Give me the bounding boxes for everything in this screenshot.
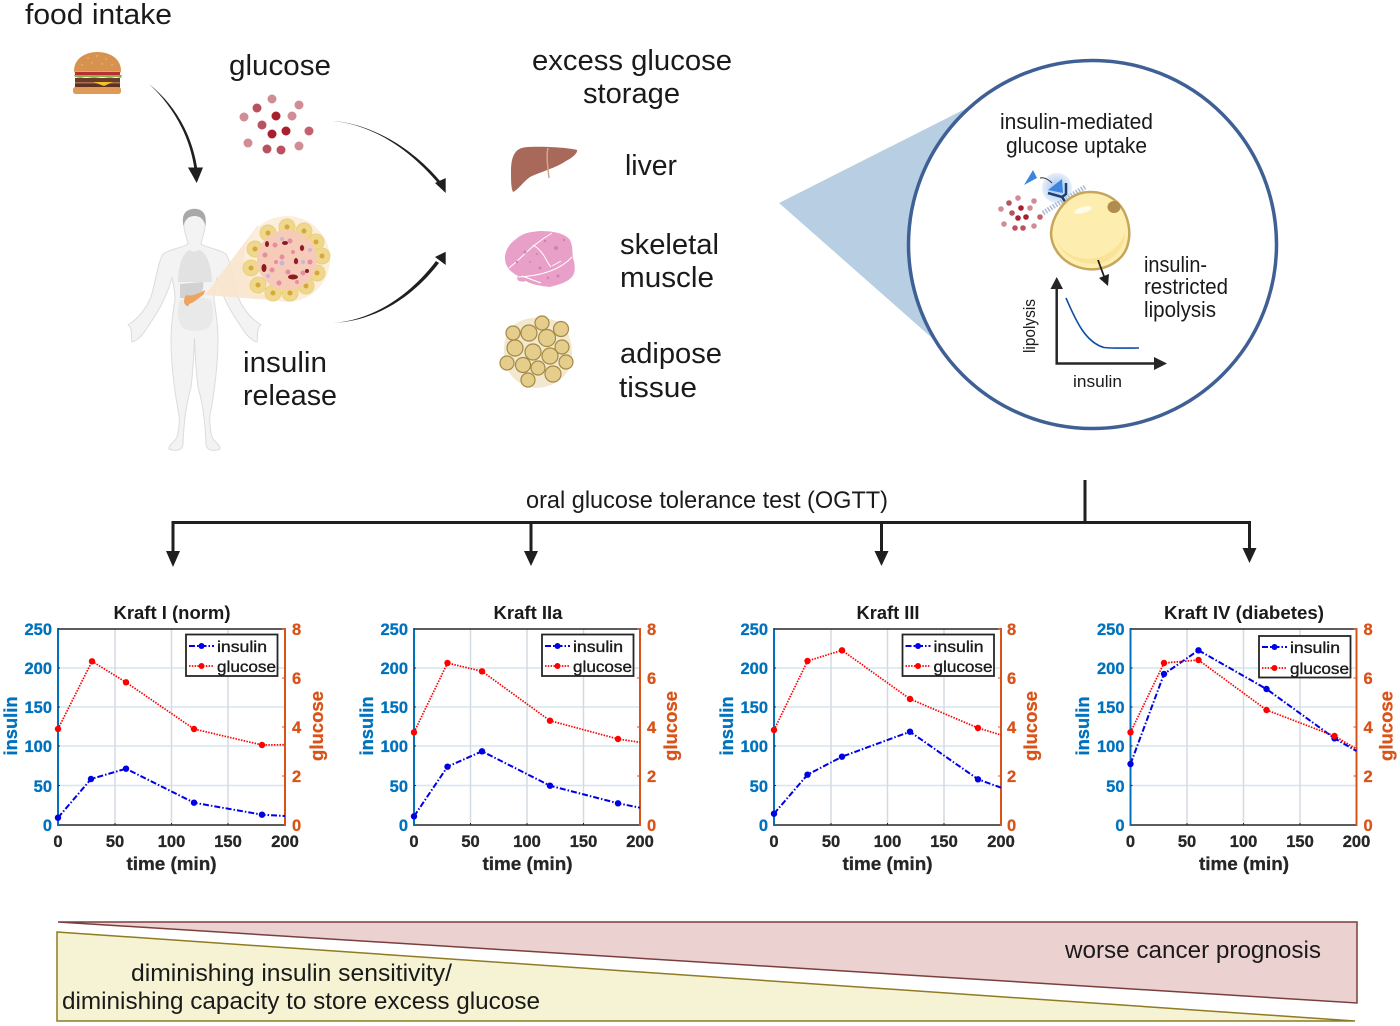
arrow: glucose to storage bbox=[333, 121, 446, 193]
chart: Kraft III bbox=[717, 603, 1041, 874]
chart: Kraft IV (diabetes): 150 bbox=[1286, 833, 1314, 851]
chart: Kraft IIa: insulin bbox=[573, 639, 623, 656]
chart: Kraft III: 150 bbox=[740, 699, 768, 717]
chart: Kraft III: 6 bbox=[1007, 670, 1016, 688]
icon: adipose tissue bbox=[500, 316, 573, 388]
chart: Kraft IV (diabetes): 250 bbox=[1097, 621, 1124, 639]
chart: Kraft IIa: 100 bbox=[380, 738, 408, 756]
chart: Kraft IIa: 150 bbox=[570, 833, 597, 851]
chart: Kraft III: insulin bbox=[717, 696, 737, 756]
chart: Kraft IV (diabetes): 6 bbox=[1364, 670, 1373, 688]
chart: Kraft III: time (min) bbox=[842, 854, 932, 874]
heading: insulin-mediated glucose uptake: insulin-mediated bbox=[1000, 109, 1153, 134]
chart: Kraft I (norm): insulin bbox=[217, 639, 267, 656]
chart: Kraft I (norm): 2 bbox=[292, 768, 301, 786]
wedge: diminishing insulin sensitivity bbox=[57, 932, 1355, 1021]
chart: Kraft I (norm): 100 bbox=[158, 833, 185, 851]
chart: Kraft IIa: 50 bbox=[461, 833, 480, 851]
arrows: OGTT tree bbox=[166, 480, 1256, 567]
chart: Kraft I (norm): 8 bbox=[292, 621, 301, 639]
icon: insulin receptor bbox=[1024, 170, 1085, 213]
chart: Kraft I (norm): 150 bbox=[214, 833, 242, 851]
chart: Kraft IV (diabetes): 4 bbox=[1364, 719, 1374, 737]
chart: Kraft III: 250 bbox=[740, 621, 768, 639]
label: adipose tissue: tissue bbox=[619, 372, 697, 404]
panel: adipocyte magnifier circle bbox=[908, 60, 1276, 428]
chart: Kraft I (norm): time (min) bbox=[126, 854, 216, 874]
chart: Kraft I (norm): glucose bbox=[307, 691, 327, 761]
chart: Kraft IIa: 0 bbox=[647, 817, 656, 835]
chart: Kraft IV (diabetes) bbox=[1073, 603, 1396, 874]
chart: Kraft I (norm): 0 bbox=[53, 833, 63, 851]
wedge: diminishing insulin sensitivity: diminishing insulin sensitivity/ bbox=[131, 960, 452, 987]
heading: insulin release bbox=[243, 347, 337, 412]
chart: Kraft IV (diabetes): 8 bbox=[1364, 621, 1373, 639]
chart: Kraft III: 2 bbox=[1007, 768, 1016, 786]
chart: Kraft IIa: 200 bbox=[626, 833, 654, 851]
chart: Kraft IV (diabetes): 200 bbox=[1343, 833, 1370, 851]
chart: Kraft I (norm): 0 bbox=[43, 817, 52, 835]
chart: lipolysis vs insulin: lipolysis bbox=[1020, 299, 1039, 353]
chart: Kraft IV (diabetes): insulin bbox=[1073, 696, 1093, 756]
chart: Kraft IIa: 100 bbox=[513, 833, 541, 851]
icon: pancreatic islet bbox=[205, 216, 330, 302]
chart: Kraft III: insulin bbox=[934, 639, 984, 656]
chart: Kraft III: 200 bbox=[740, 660, 768, 678]
chart: Kraft IV (diabetes): 0 bbox=[1115, 817, 1124, 835]
chart: Kraft I (norm): 250 bbox=[24, 621, 52, 639]
chart: Kraft IV (diabetes): glucose bbox=[1376, 691, 1396, 761]
heading: excess glucose storage: excess glucose bbox=[532, 45, 732, 77]
chart: Kraft IIa: 6 bbox=[647, 670, 656, 688]
label: insulin-restricted lipolysis: insulin- bbox=[1144, 252, 1207, 277]
heading: glucose: glucose bbox=[229, 50, 331, 82]
chart: Kraft IV (diabetes): 200 bbox=[1097, 660, 1124, 678]
chart: Kraft IIa: insulin bbox=[357, 696, 377, 756]
chart: Kraft I (norm): 150 bbox=[24, 699, 52, 717]
chart: Kraft IV (diabetes): 2 bbox=[1364, 768, 1373, 786]
heading: insulin release: insulin bbox=[243, 347, 327, 379]
arrow: insulin to storage bbox=[333, 252, 446, 323]
label: adipose tissue bbox=[619, 338, 722, 404]
chart: Kraft IV (diabetes): insulin bbox=[1290, 640, 1340, 657]
chart: Kraft I (norm): 200 bbox=[271, 833, 299, 851]
chart: Kraft IIa: Kraft IIa bbox=[494, 603, 564, 623]
heading: insulin release: release bbox=[243, 380, 337, 412]
chart: Kraft III: 4 bbox=[1007, 719, 1017, 737]
zoom cone bbox=[779, 104, 975, 345]
chart: Kraft III: 0 bbox=[759, 817, 768, 835]
label: insulin-restricted lipolysis: lipolysis bbox=[1144, 297, 1216, 322]
chart: Kraft III: 150 bbox=[930, 833, 958, 851]
wedge: worse cancer prognosis: worse cancer prognosis bbox=[1064, 937, 1321, 964]
label: insulin-restricted lipolysis bbox=[1144, 252, 1228, 322]
chart: Kraft IIa bbox=[357, 603, 681, 874]
chart: Kraft III: 0 bbox=[769, 833, 779, 851]
icon: human body with pancreas bbox=[128, 209, 261, 450]
chart: Kraft I (norm): insulin bbox=[1, 696, 21, 756]
chart: Kraft I (norm): Kraft I (norm) bbox=[114, 603, 230, 623]
chart: lipolysis vs insulin: insulin bbox=[1073, 372, 1122, 391]
heading: excess glucose storage bbox=[532, 45, 732, 110]
chart: Kraft IIa: time (min) bbox=[482, 854, 572, 874]
heading: excess glucose storage: storage bbox=[583, 78, 680, 110]
chart: Kraft I (norm): 6 bbox=[292, 670, 301, 688]
icon: skeletal muscle bbox=[505, 231, 575, 287]
chart: Kraft I (norm): 0 bbox=[292, 817, 301, 835]
wedge: worse cancer prognosis bbox=[58, 922, 1357, 1003]
chart: Kraft IV (diabetes): 0 bbox=[1126, 833, 1135, 851]
arrow: lipolysis output bbox=[1098, 260, 1109, 286]
chart: Kraft III: 0 bbox=[1007, 817, 1016, 835]
heading: OGTT: oral glucose tolerance test (OGTT) bbox=[526, 487, 888, 514]
chart: Kraft III: 100 bbox=[874, 833, 901, 851]
chart: Kraft IV (diabetes): 100 bbox=[1230, 833, 1257, 851]
chart: Kraft III: 100 bbox=[740, 738, 768, 756]
chart: Kraft III: glucose bbox=[934, 659, 993, 676]
chart: Kraft III: 50 bbox=[822, 833, 840, 851]
icon: glucose molecules bbox=[240, 94, 314, 154]
chart: Kraft IIa: 50 bbox=[390, 778, 408, 796]
chart: Kraft IV (diabetes): 0 bbox=[1364, 817, 1373, 835]
chart: Kraft IV (diabetes): 50 bbox=[1106, 778, 1124, 796]
icon: adipocyte bbox=[1051, 192, 1129, 269]
chart: Kraft I (norm): 200 bbox=[24, 660, 52, 678]
chart: Kraft IIa: 150 bbox=[380, 699, 408, 717]
chart: Kraft III: 50 bbox=[750, 778, 768, 796]
label: skeletal muscle: muscle bbox=[620, 262, 714, 294]
icon: small glucose molecules bbox=[998, 195, 1043, 231]
heading: insulin-mediated glucose uptake: glucose uptake bbox=[1006, 133, 1147, 158]
chart: Kraft IIa: 250 bbox=[380, 621, 408, 639]
chart: lipolysis vs insulin bbox=[1020, 277, 1167, 391]
chart: Kraft I (norm): 100 bbox=[24, 738, 52, 756]
chart: Kraft I (norm): 50 bbox=[106, 833, 124, 851]
chart: Kraft IV (diabetes): 150 bbox=[1097, 699, 1124, 717]
label: skeletal muscle bbox=[620, 229, 719, 294]
icon: liver bbox=[511, 147, 577, 192]
chart: Kraft III: glucose bbox=[1021, 691, 1041, 761]
chart: Kraft III: Kraft III bbox=[856, 603, 920, 623]
chart: Kraft IIa: 0 bbox=[399, 817, 408, 835]
chart: Kraft IV (diabetes): 50 bbox=[1178, 833, 1196, 851]
chart: Kraft I (norm): 50 bbox=[34, 778, 52, 796]
label: skeletal muscle: skeletal bbox=[620, 229, 719, 261]
chart: Kraft I (norm): glucose bbox=[217, 659, 276, 676]
label: insulin-restricted lipolysis: restricted bbox=[1144, 274, 1228, 299]
chart: Kraft III: 8 bbox=[1007, 621, 1016, 639]
chart: Kraft IV (diabetes): Kraft IV (diabetes) bbox=[1164, 603, 1324, 623]
chart: Kraft IIa: 2 bbox=[647, 768, 656, 786]
chart: Kraft III: 200 bbox=[987, 833, 1015, 851]
wedge: diminishing insulin sensitivity: diminishing capacity to store excess glucose bbox=[62, 988, 540, 1015]
chart: Kraft IIa: 200 bbox=[380, 660, 408, 678]
chart: Kraft IIa: 8 bbox=[647, 621, 656, 639]
chart: Kraft IV (diabetes): time (min) bbox=[1199, 854, 1289, 874]
arrow: food to body bbox=[149, 84, 203, 183]
chart: Kraft IIa: 0 bbox=[409, 833, 419, 851]
chart: Kraft IIa: 4 bbox=[647, 719, 657, 737]
chart: Kraft I (norm): 4 bbox=[292, 719, 302, 737]
chart: Kraft IV (diabetes): 100 bbox=[1097, 738, 1124, 756]
label: liver: liver bbox=[625, 150, 677, 182]
chart: Kraft IIa: glucose bbox=[661, 691, 681, 761]
label: adipose tissue: adipose bbox=[620, 338, 722, 370]
chart: Kraft I (norm) bbox=[1, 603, 327, 874]
heading: insulin-mediated glucose uptake bbox=[1000, 109, 1153, 158]
chart: Kraft IV (diabetes): glucose bbox=[1290, 661, 1349, 678]
icon: burger bbox=[73, 52, 122, 94]
chart: Kraft IIa: glucose bbox=[573, 659, 632, 676]
